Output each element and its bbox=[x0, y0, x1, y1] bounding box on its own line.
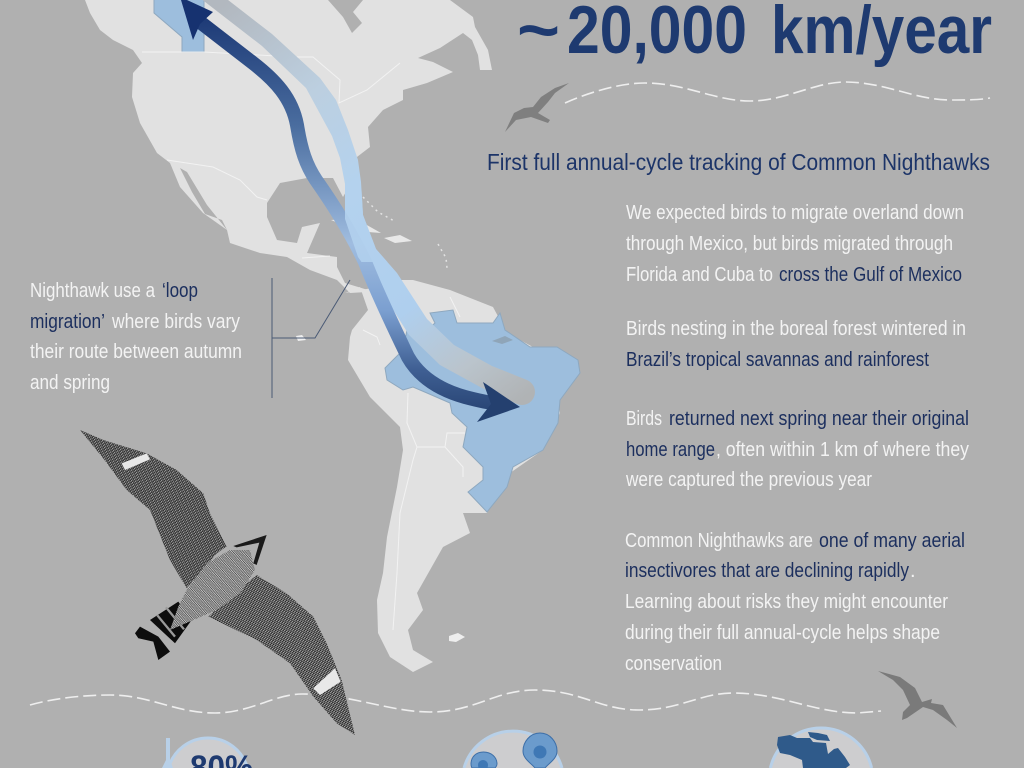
text block: loop migration bbox=[30, 280, 242, 394]
text block: conservation: Common Nighthawks are bbox=[625, 530, 813, 552]
spring arrow head north bbox=[181, 0, 213, 40]
spring arrow head south bbox=[477, 382, 520, 422]
Brazil wintering range bbox=[385, 310, 580, 512]
text block: wintering: Brazil’s tropical savannas and rainforest bbox=[626, 349, 929, 371]
text block: conservation bbox=[625, 530, 965, 675]
right wing bbox=[208, 575, 355, 735]
text block: expected route: We expected birds to migrate overland down bbox=[626, 202, 964, 224]
icon: small grey bird bottom bbox=[878, 671, 957, 728]
text block: conservation: insectivores that are declining rapidly bbox=[625, 560, 909, 582]
white wing patch right bbox=[313, 668, 341, 695]
text block: loop migration: and spring bbox=[30, 372, 110, 394]
country borders bbox=[142, 52, 465, 630]
small pin bbox=[471, 752, 497, 768]
text block: loop migration: their route between autumn bbox=[30, 341, 242, 363]
autumn route overlap at the crossing bbox=[345, 192, 388, 262]
spring route: dark arrow bbox=[181, 0, 520, 422]
Hispaniola bbox=[384, 235, 412, 243]
subtitle: First full annual-cycle tracking of Common Nighthawks bbox=[487, 149, 990, 175]
text block: conservation: during their full annual-cycle helps shape bbox=[625, 622, 940, 644]
text block: return bbox=[625, 408, 969, 491]
text block: loop migration: migration’ bbox=[30, 311, 105, 333]
tail bands bbox=[157, 607, 184, 637]
map of the Americas bbox=[85, 0, 580, 672]
text block: return: were captured the previous year bbox=[625, 469, 872, 491]
head bbox=[233, 535, 267, 565]
text block: expected route bbox=[626, 202, 964, 286]
callout bracket line bbox=[272, 278, 350, 398]
small pin dot bbox=[478, 760, 488, 768]
Alberta breeding range bbox=[154, 0, 204, 52]
circle bbox=[770, 728, 872, 768]
stat: location pins bbox=[464, 731, 562, 768]
text block: return: , often within 1 km of where they bbox=[716, 439, 969, 461]
arctic islands bbox=[808, 732, 830, 741]
circle bbox=[464, 731, 562, 768]
Falkland Islands bbox=[449, 633, 465, 642]
stat: globe with North America bbox=[770, 728, 872, 768]
text block: expected route: Florida and Cuba to bbox=[626, 264, 773, 286]
text block: conservation: conservation bbox=[625, 653, 722, 675]
left wing bbox=[80, 430, 227, 588]
text block: loop migration: Nighthawk use a bbox=[30, 280, 156, 302]
text block: expected route: cross the Gulf of Mexico bbox=[779, 264, 962, 286]
bar bbox=[162, 738, 173, 768]
illustration: nighthawk in flight bbox=[80, 430, 355, 735]
text block: conservation: one of many aerial bbox=[819, 530, 965, 552]
body bbox=[170, 550, 255, 630]
text block: wintering: Birds nesting in the boreal forest wintered in bbox=[626, 318, 966, 340]
text block: wintering bbox=[626, 318, 966, 371]
autumn route: light arrow bbox=[200, 0, 535, 405]
North and Central America landmass bbox=[85, 0, 492, 298]
text block: loop migration: ‘loop bbox=[162, 280, 198, 302]
text block: conservation: . bbox=[910, 560, 916, 582]
dashed flight path bottom bbox=[30, 690, 881, 713]
mainland bbox=[777, 735, 850, 768]
text block: return: home range bbox=[626, 439, 715, 461]
text block: conservation: Learning about risks they might encounter bbox=[625, 591, 948, 613]
Amazon mouth bbox=[492, 336, 513, 344]
route arrows bbox=[181, 0, 535, 422]
Gulf of California bbox=[180, 168, 227, 230]
Cuba bbox=[331, 219, 381, 233]
text block: expected route: through Mexico, but birds migrated through bbox=[626, 233, 953, 255]
Bahamas and Antilles bbox=[363, 197, 447, 268]
white wing patch left bbox=[122, 453, 150, 470]
icon: small grey bird top bbox=[505, 83, 569, 132]
dashed flight path top bbox=[565, 82, 990, 103]
large pin dot bbox=[534, 746, 546, 758]
South America landmass bbox=[345, 280, 580, 672]
Galapagos bbox=[296, 335, 306, 341]
title bbox=[517, 0, 992, 68]
text block: loop migration: where birds vary bbox=[111, 311, 240, 333]
tail bbox=[135, 602, 192, 660]
stat: 80 percent bbox=[162, 738, 253, 768]
text block: return: Birds bbox=[626, 408, 662, 430]
circle bbox=[168, 738, 248, 768]
text block: return: returned next spring near their original bbox=[669, 408, 969, 430]
large pin bbox=[523, 733, 557, 768]
